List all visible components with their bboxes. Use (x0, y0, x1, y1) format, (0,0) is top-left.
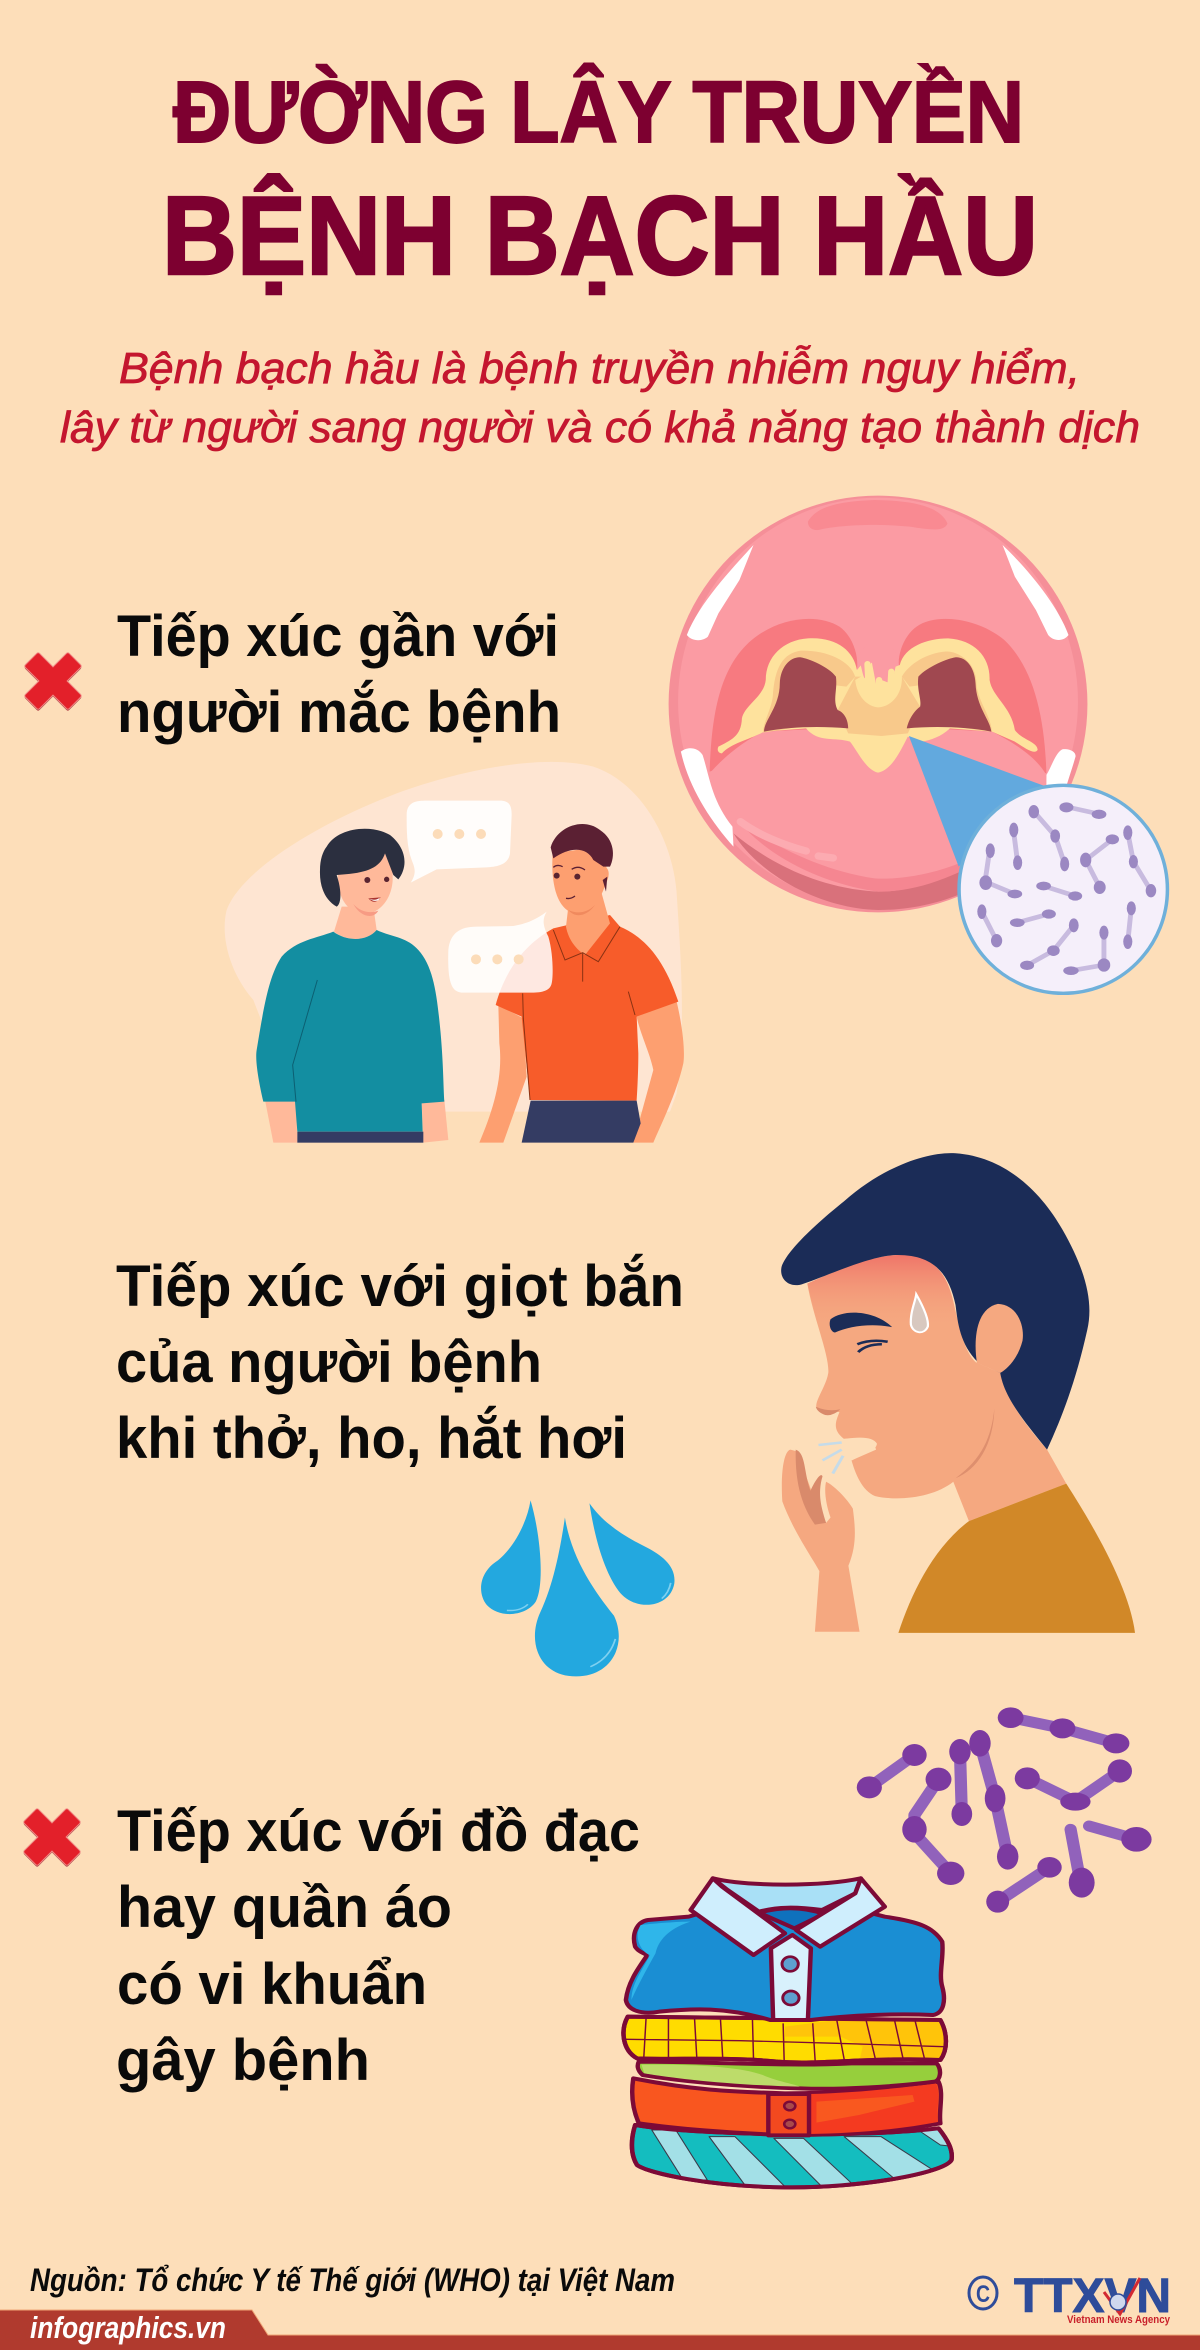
text block: droplets: khi thở, ho, hắt hơi (116, 1406, 627, 1471)
man in orange polo (479, 824, 684, 1143)
text block: droplets: Tiếp xúc với giọt bắn (116, 1254, 684, 1319)
water drops (481, 1500, 675, 1676)
illustration: coughing man and water drops (481, 1153, 1135, 1676)
shirt (898, 1484, 1135, 1633)
subtitle (60, 344, 1140, 452)
hand (782, 1442, 860, 1632)
text block: contaminated objects: có vi khuẩn (117, 1952, 427, 2017)
text block: contaminated objects: Tiếp xúc với đồ đạc (117, 1799, 640, 1864)
text block: contaminated objects: hay quần áo (117, 1875, 452, 1940)
subtitle: lây từ người sang người và có khả năng tạo thành dịch (60, 403, 1140, 452)
man coughing (781, 1153, 1089, 1521)
title (162, 64, 1038, 298)
footer band: infographics.vn (30, 2310, 226, 2345)
speech bubble right (448, 912, 553, 993)
magnifier pointer (909, 736, 1046, 867)
subtitle: Bệnh bạch hầu là bệnh truyền nhiễm nguy hiểm, (119, 344, 1080, 393)
green shirt (638, 2062, 940, 2089)
source note: Nguồn: Tổ chức Y tế Thế giới (WHO) tại Việt Nam (30, 2262, 675, 2298)
text block: contaminated objects: gây bệnh (116, 2028, 370, 2093)
teeth (681, 545, 1076, 847)
icon: red cross 1 (8, 637, 98, 726)
logo: TTXVN: TTXVN (1014, 2270, 1171, 2323)
text block: droplets: của người bệnh (116, 1330, 542, 1395)
text block: droplets (116, 1254, 684, 1471)
logo: TTXVN: C (976, 2281, 990, 2308)
text block: close contact: Tiếp xúc gần với (117, 604, 559, 669)
icon: red cross 2 (7, 1793, 97, 1882)
illustration: throat with diphtheria membrane (669, 496, 1167, 993)
purple bacteria (857, 1707, 1152, 1913)
magnified bacteria circle (959, 785, 1167, 993)
text block: close contact: người mắc bệnh (117, 680, 561, 745)
teal shirt (632, 2125, 955, 2187)
yellow shirt (624, 2015, 948, 2063)
dark throat openings (764, 657, 848, 732)
stack of clothes (624, 1878, 955, 2187)
text block: contaminated objects (116, 1799, 640, 2093)
tongue (710, 728, 1046, 910)
illustration: clothes and bacteria (624, 1707, 1152, 2187)
illustration: two people talking (225, 762, 684, 1143)
title: BỆNH BẠCH HẦU (162, 174, 1038, 298)
logo: TTXVN: Vietnam News Agency (1067, 2314, 1171, 2326)
speech bubble left (407, 801, 512, 883)
footer band (0, 2310, 1200, 2350)
orange shirt (632, 2078, 941, 2135)
text block: close contact (117, 604, 561, 745)
title: ĐƯỜNG LÂY TRUYỀN (173, 64, 1024, 161)
throat arches (710, 619, 857, 772)
blue polo (626, 1878, 944, 2020)
membrane (718, 638, 1038, 773)
man in teal sweater (256, 829, 448, 1143)
